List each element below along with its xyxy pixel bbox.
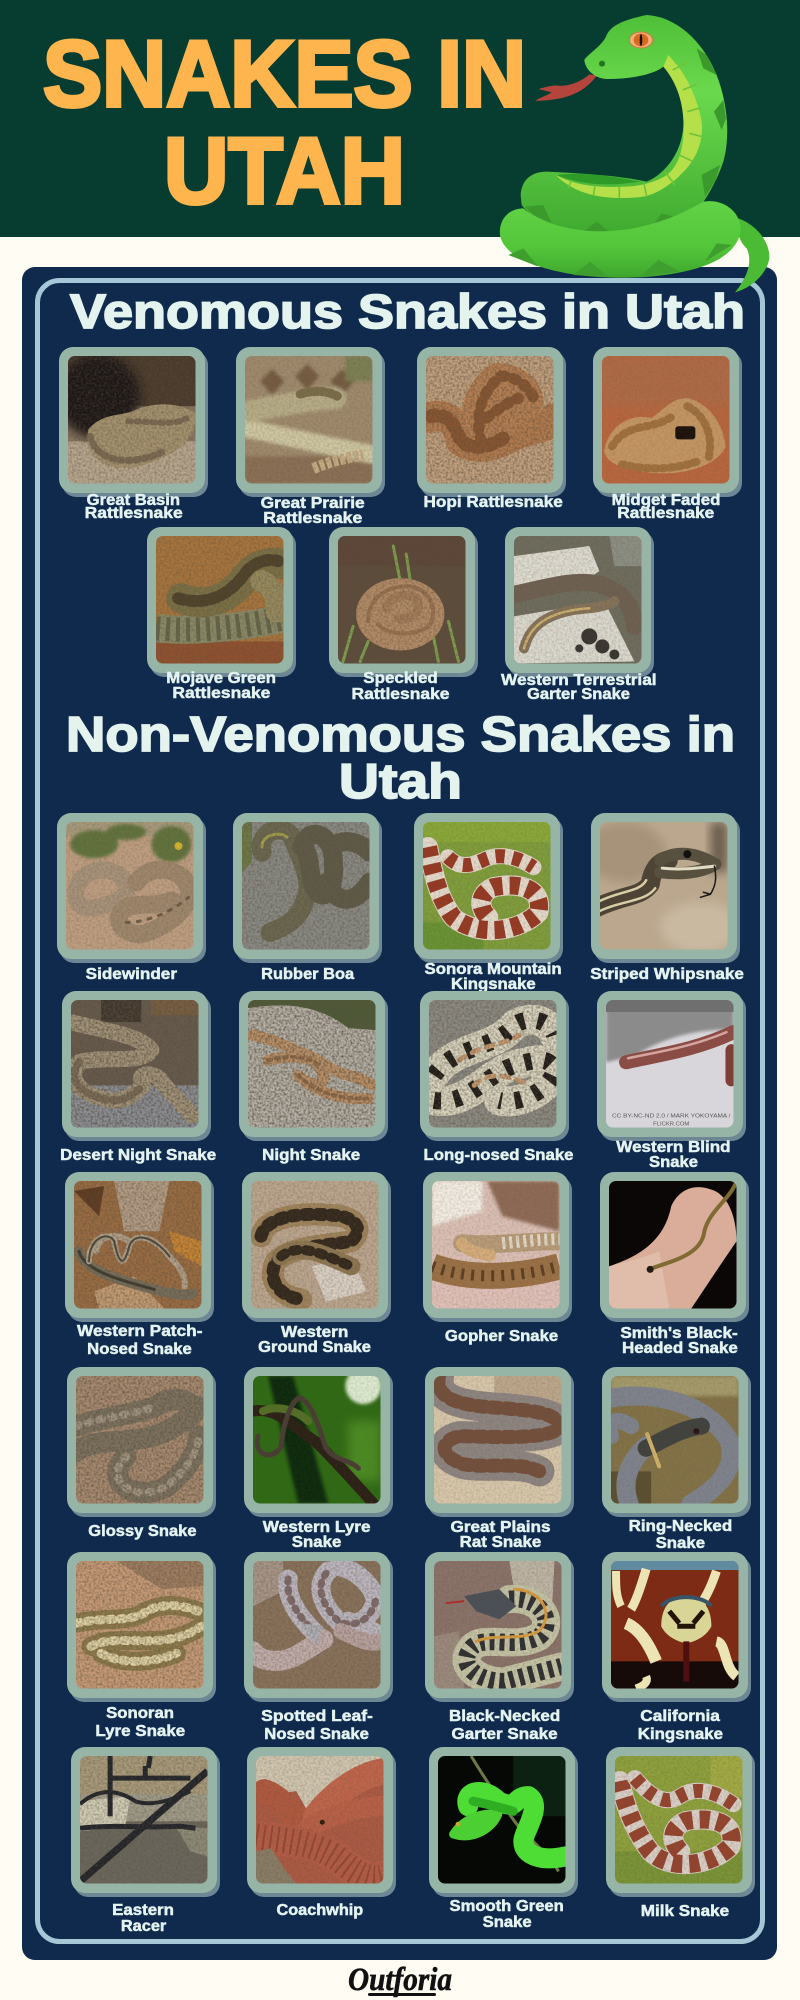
label: Sidewinder: Sidewinder xyxy=(86,966,177,983)
label: Great Prairie Rattlesnake: Rattlesnake xyxy=(263,510,363,527)
label: Spotted Leaf-Nosed Snake xyxy=(261,1708,373,1743)
label: Desert Night Snake: Desert Night Snake xyxy=(60,1147,217,1164)
header band xyxy=(0,0,800,237)
label: Smooth Green Snake: Snake xyxy=(483,1914,532,1931)
label: Midget Faded Rattlesnake: Midget Faded xyxy=(612,492,720,509)
card: Mojave Green Rattlesnake photo xyxy=(147,527,296,677)
label: Black-Necked Garter Snake xyxy=(449,1708,560,1743)
label: Mojave Green Rattlesnake: Rattlesnake xyxy=(172,685,271,702)
card: Coachwhip photo xyxy=(247,1747,396,1897)
heading: venomous: Venomous Snakes in Utah xyxy=(70,286,745,339)
label: Great Prairie Rattlesnake xyxy=(261,495,365,527)
label: Speckled Rattlesnake xyxy=(352,670,450,703)
panel: snake list background xyxy=(22,267,777,1960)
label: Western Blind Snake: Snake xyxy=(649,1154,698,1171)
label: Milk Snake: Milk Snake xyxy=(641,1903,730,1920)
photo credit text xyxy=(612,1114,730,1126)
label: Western Blind Snake: Western Blind xyxy=(616,1139,731,1156)
label: Eastern Racer xyxy=(112,1902,174,1935)
label: Sonoran Lyre Snake xyxy=(95,1705,186,1740)
label: Great Plains Rat Snake: Great Plains xyxy=(450,1519,550,1536)
label: Gopher Snake: Gopher Snake xyxy=(445,1328,559,1345)
label: Coachwhip: Coachwhip xyxy=(276,1902,363,1919)
icon: green snake xyxy=(500,15,769,292)
label: Western Blind Snake xyxy=(616,1139,731,1171)
card: Hopi Rattlesnake photo xyxy=(417,347,566,497)
card: Western Patch-Nosed Snake photo xyxy=(65,1172,214,1322)
label: Western Ground Snake xyxy=(258,1324,371,1356)
label: Ring-Necked Snake xyxy=(629,1518,732,1552)
label: Western Ground Snake: Ground Snake xyxy=(258,1339,371,1356)
heading: non-venomous: Non-Venomous Snakes in xyxy=(66,708,735,762)
title: SNAKES IN xyxy=(43,21,526,126)
card: Smooth Green Snake photo xyxy=(429,1747,578,1897)
label: Western Patch-Nosed Snake xyxy=(77,1323,202,1358)
card: Desert Night Snake photo xyxy=(62,991,211,1141)
label: Sonora Mountain Kingsnake: Kingsnake xyxy=(451,976,536,993)
card: Great Plains Rat Snake photo xyxy=(425,1367,574,1517)
label: Smith's Black-Headed Snake: Headed Snake xyxy=(622,1340,738,1357)
card: Gopher Snake photo xyxy=(423,1172,572,1322)
label: Black-Necked Garter Snake: Black-Necked xyxy=(449,1708,560,1725)
card: Black-Necked Garter Snake photo xyxy=(425,1552,574,1702)
card: Speckled Rattlesnake photo xyxy=(329,527,478,677)
label: California Kingsnake: Kingsnake xyxy=(638,1726,723,1743)
label: Sonora Mountain Kingsnake: Sonora Mountain xyxy=(424,961,562,978)
label: Ring-Necked Snake: Snake xyxy=(656,1535,706,1552)
card: Great Prairie Rattlesnake photo xyxy=(236,347,385,497)
label: Midget Faded Rattlesnake xyxy=(612,492,720,522)
label: Speckled Rattlesnake: Speckled xyxy=(363,670,438,687)
label: Western Terrestrial Garter Snake xyxy=(501,672,657,703)
label: Smith's Black-Headed Snake xyxy=(620,1325,738,1357)
label: California Kingsnake xyxy=(638,1708,723,1743)
label: Sonoran Lyre Snake: Lyre Snake xyxy=(95,1723,186,1740)
title xyxy=(43,21,526,223)
label: Sonoran Lyre Snake: Sonoran xyxy=(106,1705,174,1722)
card: Sidewinder photo xyxy=(57,813,206,963)
card: Milk Snake photo xyxy=(606,1747,755,1897)
label: Mojave Green Rattlesnake xyxy=(166,670,276,702)
card: Western Terrestrial Garter Snake photo xyxy=(505,527,654,677)
label: Black-Necked Garter Snake: Garter Snake xyxy=(452,1726,558,1743)
card: Western Ground Snake photo xyxy=(242,1172,391,1322)
label: Ring-Necked Snake: Ring-Necked xyxy=(629,1518,732,1535)
label: Spotted Leaf-Nosed Snake: Nosed Snake xyxy=(264,1726,369,1743)
panel inner border xyxy=(38,280,762,1942)
card: Great Basin Rattlesnake photo xyxy=(56,347,208,497)
card: Ring-Necked Snake photo xyxy=(602,1367,751,1517)
card: Midget Faded Rattlesnake photo xyxy=(593,347,742,497)
photo credit text: CC BY-NC-ND 2.0 / MARK YOKOYAMA / xyxy=(612,1113,731,1119)
label: Midget Faded Rattlesnake: Rattlesnake xyxy=(617,505,715,522)
card: Spotted Leaf-Nosed Snake photo xyxy=(244,1552,393,1702)
card: Sonoran Lyre Snake photo xyxy=(67,1552,216,1702)
label: Western Patch-Nosed Snake: Nosed Snake xyxy=(87,1341,192,1358)
label: Sonora Mountain Kingsnake xyxy=(424,961,562,993)
label: Western Ground Snake: Western xyxy=(281,1324,348,1341)
label: Great Basin Rattlesnake: Great Basin xyxy=(87,492,180,509)
heading: non-venomous xyxy=(66,708,735,809)
label: Eastern Racer: Racer xyxy=(121,1918,166,1935)
logo: Outforia: Outforia xyxy=(348,1962,452,1998)
label: Western Lyre Snake xyxy=(263,1519,371,1551)
heading: non-venomous: Utah xyxy=(339,755,462,809)
label: California Kingsnake: California xyxy=(640,1708,720,1725)
label: Spotted Leaf-Nosed Snake: Spotted Leaf- xyxy=(261,1708,373,1725)
card: Western Lyre Snake photo xyxy=(244,1367,393,1517)
card: Eastern Racer photo xyxy=(71,1747,220,1897)
label: Eastern Racer: Eastern xyxy=(112,1902,174,1919)
label: Speckled Rattlesnake: Rattlesnake xyxy=(352,686,450,703)
label: Great Basin Rattlesnake xyxy=(85,492,183,522)
label: Glossy Snake: Glossy Snake xyxy=(88,1523,197,1540)
photo credit text: FLICKR.COM xyxy=(653,1121,689,1127)
label: Striped Whipsnake: Striped Whipsnake xyxy=(590,966,744,983)
card: Sonora Mountain Kingsnake photo xyxy=(414,813,563,963)
label: Smooth Green Snake xyxy=(450,1898,564,1931)
card: Glossy Snake photo xyxy=(67,1367,216,1517)
label: Rubber Boa: Rubber Boa xyxy=(261,966,354,983)
label: Western Lyre Snake: Western Lyre xyxy=(263,1519,371,1536)
title: UTAH xyxy=(164,118,405,223)
label: Smith's Black-Headed Snake: Smith's Black- xyxy=(620,1325,738,1342)
label: Night Snake: Night Snake xyxy=(262,1147,361,1164)
label: Western Terrestrial Garter Snake: Western Terrestrial xyxy=(501,672,657,689)
card: Western Blind Snake photo xyxy=(597,991,746,1141)
label: Western Terrestrial Garter Snake: Garter Snake xyxy=(527,686,630,703)
label: Smooth Green Snake: Smooth Green xyxy=(450,1898,564,1915)
label: Great Prairie Rattlesnake: Great Prairie xyxy=(261,495,365,512)
label: Mojave Green Rattlesnake: Mojave Green xyxy=(166,670,276,687)
card: Smith's Black-Headed Snake photo xyxy=(600,1172,749,1322)
label: Great Basin Rattlesnake: Rattlesnake xyxy=(85,505,183,522)
label: Western Lyre Snake: Snake xyxy=(292,1534,342,1551)
card: Long-nosed Snake photo xyxy=(420,991,569,1141)
card: California Kingsnake photo xyxy=(602,1552,751,1702)
label: Long-nosed Snake: Long-nosed Snake xyxy=(424,1147,574,1164)
label: Great Plains Rat Snake: Rat Snake xyxy=(460,1534,542,1551)
card: Night Snake photo xyxy=(239,991,388,1141)
label: Western Patch-Nosed Snake: Western Patch- xyxy=(77,1323,202,1340)
card: Striped Whipsnake photo xyxy=(585,813,741,963)
label: Great Plains Rat Snake xyxy=(450,1519,550,1551)
card: Rubber Boa photo xyxy=(233,813,382,963)
label: Hopi Rattlesnake: Hopi Rattlesnake xyxy=(424,494,563,511)
